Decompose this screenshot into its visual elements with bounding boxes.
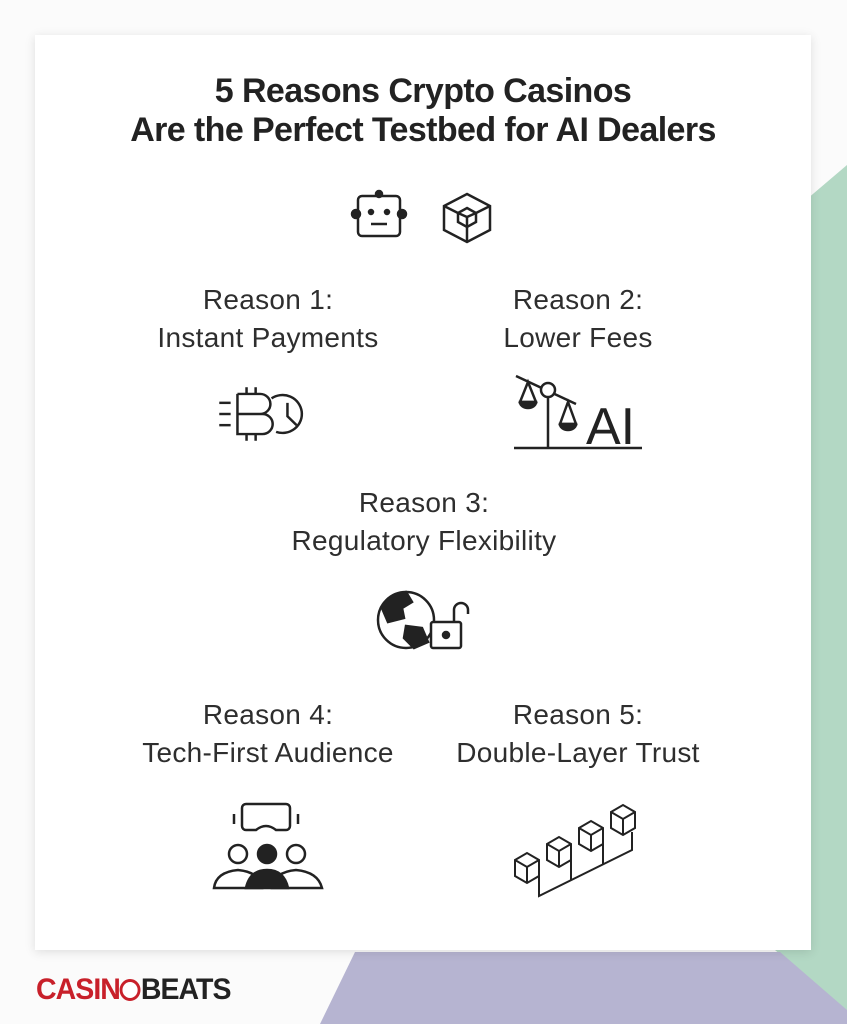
reason 2: Lower Fees [503,322,653,353]
reason 2: Reason 2: [513,284,643,315]
title: Are the Perfect Testbed for AI Dealers [130,111,716,149]
reason 1: Reason 1: [203,284,333,315]
icon: bitcoin clock [219,387,304,441]
reason 5: Double-Layer Trust [456,737,700,768]
icon: VR audience [212,802,324,890]
reason 4: Reason 4: [203,699,333,730]
reason 4: Tech-First Audience [142,737,394,768]
reason 1: Instant Payments [157,322,379,353]
icon: globe unlock [376,590,470,650]
reason 5 [456,699,700,768]
title [130,72,716,149]
logo: CASIN BEATS [36,973,231,1006]
reason 3 [292,487,556,556]
reason 2 [503,284,653,353]
icon: blockchain blocks [514,804,636,898]
icon: scales AI [514,374,642,452]
reason 5: Reason 5: [513,699,643,730]
reason 4 [142,699,394,768]
reason 1 [157,284,379,353]
title: 5 Reasons Crypto Casinos [215,72,631,110]
reason 3: Regulatory Flexibility [292,525,556,556]
reason 3: Reason 3: [359,487,489,518]
icon: robot and cube [350,190,492,244]
